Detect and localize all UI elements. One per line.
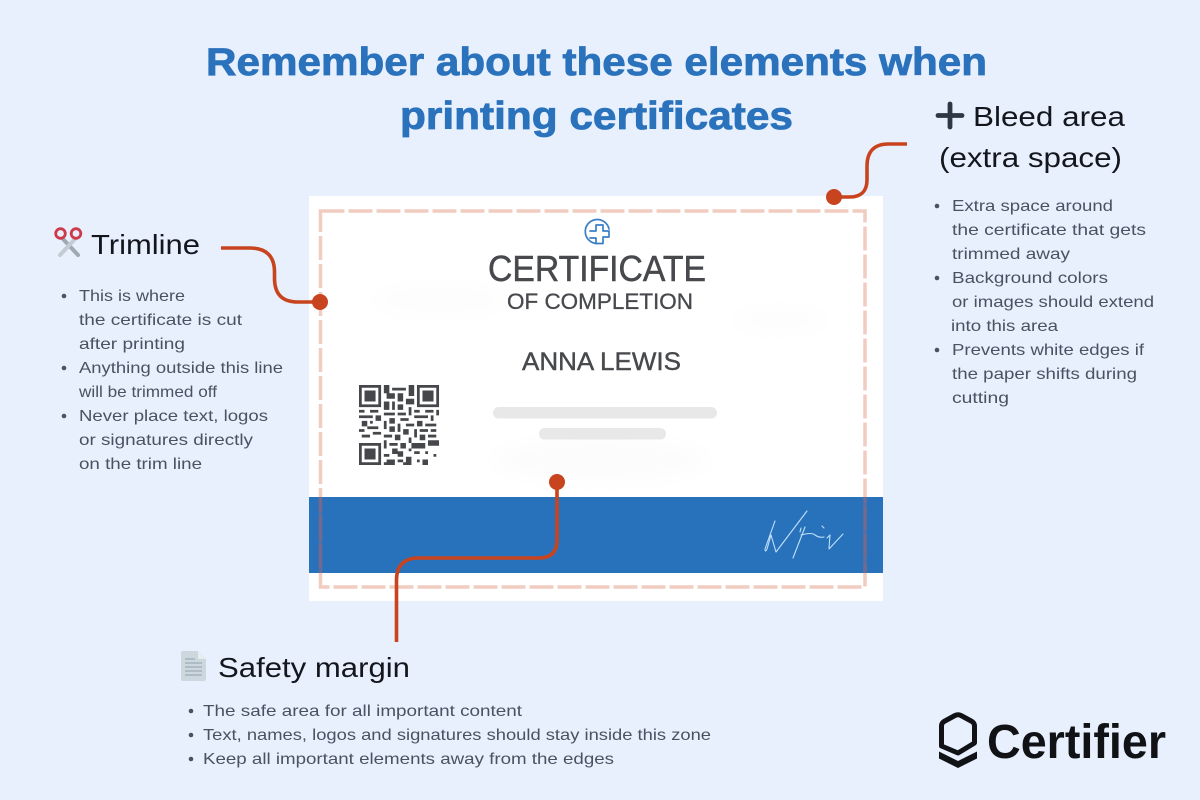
panel: safety margin (181, 651, 711, 768)
safety margin bullets: Keep all important elements away from the edges (203, 751, 614, 768)
certificate subheading: OF COMPLETION (507, 289, 693, 314)
recipient name: ANNA LEWIS (522, 348, 681, 376)
icon: document (181, 651, 206, 681)
trimline bullets: on the trim line (79, 456, 202, 473)
bleed dashed line (320, 211, 865, 587)
panel: bleed area: (extra space) (939, 142, 1122, 173)
bleed area bullets: trimmed away (952, 246, 1070, 263)
title (206, 41, 987, 138)
safety margin bullets (189, 703, 711, 768)
connector: safety margin (396, 474, 565, 642)
connector: bleed area (826, 144, 907, 205)
panel: bleed area (935, 101, 1154, 407)
trimline bullets: Anything outside this line (79, 360, 283, 377)
bleed area bullets: Extra space around (952, 198, 1113, 215)
trimline bullets (62, 288, 283, 473)
bleed area bullets: into this area (951, 318, 1058, 335)
logo wordmark: Certifier (987, 716, 1166, 769)
icon: scissors (56, 229, 81, 255)
Certifier logo (939, 715, 1166, 769)
title: printing certificates (400, 95, 793, 138)
trimline heading: Trimline (91, 229, 200, 260)
bleed area heading: Bleed area (973, 101, 1125, 132)
bleed area bullets: or images should extend (952, 294, 1154, 311)
trimline bullets: the certificate is cut (79, 312, 243, 329)
bleed area bullets: the certificate that gets (952, 222, 1146, 239)
trimline bullets: Never place text, logos (79, 408, 268, 425)
placeholder text bars (493, 407, 717, 440)
bleed area bullets: Prevents white edges if (952, 342, 1145, 359)
bleed area bullets: Background colors (952, 270, 1108, 287)
certificate heading: CERTIFICATE (488, 248, 706, 289)
safety margin bullets: The safe area for all important content (203, 703, 523, 720)
certificate logo icon (585, 220, 609, 244)
panel: trimline (56, 229, 283, 473)
trimline bullets: will be trimmed off (78, 384, 218, 401)
trimline bullets: This is where (79, 288, 185, 305)
trimline bullets: or signatures directly (79, 432, 253, 449)
safety margin bullets: Text, names, logos and signatures should stay inside this zone (203, 727, 711, 744)
bleed area bullets: the paper shifts during (952, 366, 1137, 383)
panel: certificate (309, 196, 883, 601)
title: Remember about these elements when (206, 41, 987, 84)
connector: trimline (221, 248, 328, 310)
trimline bullets: after printing (79, 336, 185, 353)
bleed area bullets (935, 198, 1154, 407)
blue band (309, 497, 883, 573)
icon: plus (938, 104, 962, 127)
QR code (359, 385, 439, 465)
safety margin heading: Safety margin (218, 652, 410, 683)
logo mark (939, 715, 977, 768)
signature (765, 511, 843, 558)
bleed area bullets: cutting (952, 390, 1009, 407)
